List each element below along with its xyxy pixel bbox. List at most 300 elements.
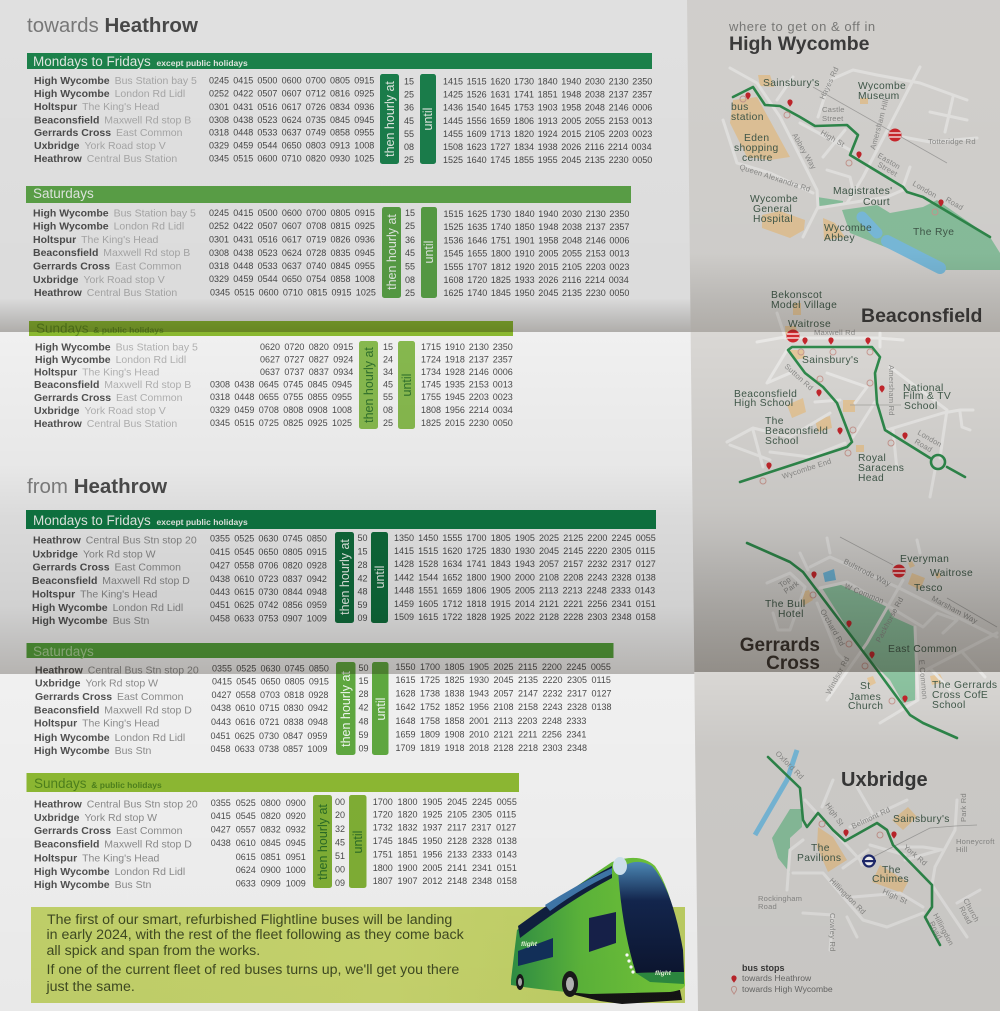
map labels: High School [734,398,793,409]
until: until [422,241,436,263]
minutes past: 25 [404,155,414,165]
late times: 1709 1819 1918 2018 2128 2218 2303 2348 [396,743,587,753]
map labels: School [932,700,966,711]
minutes past: 25 [405,288,415,298]
stop names: Holtspur The King's Head [34,366,160,378]
early times: 0345 0515 0725 0825 0925 1025 [210,418,352,428]
map: Uxbridge [755,749,995,952]
until [421,207,437,298]
early times: 0427 0557 0832 0932 [211,824,306,834]
bus route [740,347,965,482]
late times: 1715 1910 2130 2350 [421,342,513,352]
late times: 1755 1945 2203 0023 [421,392,513,402]
road labels [738,65,976,212]
header bar: Sundays & public holidays [36,321,164,336]
late times: 1425 1526 1631 1741 1851 1948 2038 2137 2357 [443,90,652,100]
late times [443,76,652,165]
road labels: Honeycroft [956,837,995,846]
stop names: Beaconsfield Maxwell Rd stop D [32,575,190,587]
early times: 0427 0558 0706 0820 0928 [210,560,327,570]
minutes past: 28 [358,560,368,570]
road labels: Park [782,579,801,596]
minutes past: 45 [405,248,415,258]
early times: 0438 0610 0715 0830 0942 [211,703,328,713]
header bar: Sundays & public holidays [34,776,162,791]
road labels: High St [819,128,847,149]
map labels: The Gerrards [932,680,997,691]
early times: 0318 0448 0533 0637 0740 0845 0955 [209,261,375,271]
road labels: Top [777,575,793,590]
minutes past: 42 [358,702,369,712]
illustration: green double-decker bus [511,857,685,1004]
minutes past: 09 [335,878,345,888]
road labels: Totteridge Rd [928,137,976,146]
minutes past: 51 [335,851,345,861]
background: right map panel [687,0,1000,1011]
callout: new Flightline buses notice: If one of the current fleet of red buses turns up, we'll get you there [46,962,459,978]
map heading: Cross [766,653,820,674]
early times: 0415 0545 0650 0805 0915 [212,676,329,686]
road labels: Church [961,897,981,924]
roads [767,537,997,723]
late times: 1720 1820 1925 2105 2305 0115 [373,810,516,820]
road labels: Park Rd [959,793,968,822]
minutes past: 20 [335,810,345,820]
early times: 0329 0459 0544 0650 0803 0913 1008 [209,140,374,150]
minutes past [335,797,345,888]
early times [209,76,374,164]
stop names: High Wycombe Bus Stn [34,879,152,891]
line to film school [850,404,901,406]
early times: 0345 0515 0600 0710 0815 0915 1025 [210,288,376,298]
map labels [797,814,950,885]
pond [823,569,836,582]
early times: 0633 0909 1009 [236,878,306,888]
map labels: Hospital [753,214,793,225]
minutes past [358,533,368,623]
stop names: Gerrards Cross East Common [34,392,183,404]
map: Beaconsfield [727,290,982,497]
early times: 0415 0545 0650 0805 0915 [210,547,327,557]
stop names: High Wycombe Bus Station bay 5 [34,75,197,87]
map labels: Magistrates' [833,186,892,197]
late times: 1509 1615 1722 1828 1925 2022 2128 2228 2303 2348 0158 [394,612,656,622]
timetable: towards Heathrow, Sundays [29,321,513,430]
road labels: Amersham Hill [868,98,890,151]
stop names: High Wycombe London Rd Lidl [34,732,185,744]
bus stops [810,571,908,704]
map labels: The [811,843,830,854]
late times: 1445 1556 1659 1806 1913 2005 2055 2153 0013 [443,116,652,126]
stop names: High Wycombe London Rd Lidl [34,88,185,100]
stop names: Gerrards Cross East Common [34,825,183,837]
then hourly at [313,795,332,888]
until: until [421,108,435,130]
minutes past: 25 [404,90,414,100]
early times: 0245 0415 0500 0600 0700 0805 0915 [209,76,374,86]
early times: 0329 0459 0708 0808 0908 1008 [210,405,352,415]
road labels: Hill [956,845,967,854]
late times: 1415 1515 1620 1725 1830 1930 2045 2145 2220 2305 0115 [394,546,655,556]
minutes past: 45 [335,838,345,848]
minutes past: 55 [404,129,414,139]
map labels: The [765,416,784,427]
minutes past: 55 [405,262,415,272]
early times: 0438 0610 0845 0945 [211,838,306,848]
road labels: Sutton Rd [783,362,815,392]
late times: 1442 1544 1652 1800 1900 2000 2108 2208 2243 2328 0138 [394,572,656,582]
early times [209,208,376,298]
stop names: Beaconsfield Maxwell Rd stop B [33,247,190,259]
early times: 0427 0558 0703 0818 0928 [212,690,328,700]
map labels: Head [858,473,884,484]
early times: 0458 0633 0753 0907 1009 [210,614,327,624]
road labels: Orchard Rd [818,608,847,648]
minutes past: 00 [335,797,345,807]
map labels: Saracens [858,463,904,474]
then hourly at [336,662,356,755]
map labels: Tesco [914,583,943,594]
stop names: Heathrow Central Bus Stn stop 20 [33,534,197,546]
map labels: Wycombe [824,223,872,234]
map labels: Sainsbury's [893,814,950,825]
early times: 0355 0525 0800 0900 [211,798,306,808]
early times [210,534,327,624]
map labels: Cross CofE [932,690,988,701]
minutes past: 25 [383,418,393,428]
early times [210,664,329,754]
stop names [34,75,197,165]
map labels: Royal [858,453,886,464]
map labels: Film & TV [903,391,951,402]
road labels: London [916,428,943,449]
minutes past: 15 [405,208,415,218]
road labels: Easton [876,151,902,171]
until [372,662,388,755]
stop names: Holtspur The King's Head [33,234,159,246]
early times: 0245 0415 0500 0600 0700 0805 0915 [209,208,375,218]
roads [787,780,980,950]
road labels [758,749,995,952]
stop names: High Wycombe Bus Stn [32,615,150,627]
icon: railway station [786,330,800,342]
road labels: Amersham Rd [887,365,896,416]
map labels: Waitrose [930,568,973,579]
early times [211,798,306,888]
timetable: towards Heathrow, Mondays to Fridays [27,53,652,165]
stop names: Holtspur The King's Head [34,101,160,113]
early times: 0438 0610 0723 0837 0942 [210,574,327,584]
map labels [734,290,951,484]
minutes past: 24 [383,354,393,364]
header bar [26,510,656,529]
road labels: Bulstrode Way [842,557,892,588]
map labels: Church [848,701,883,712]
minutes past: 50 [358,663,369,673]
map labels: shopping [734,143,779,154]
map labels: General [753,204,792,215]
until [349,795,366,888]
stop names: High Wycombe Bus Stn [34,745,152,757]
late times: 1515 1625 1730 1840 1940 2030 2130 2350 [444,209,629,219]
callout: new Flightline buses notice: in early 2024, with the rest of the fleet following as they come back [46,927,465,943]
illustration: green double-decker bus: flight [521,941,538,948]
timetable: from Heathrow, Sundays [26,773,519,891]
road labels: Hayes Rd [818,65,841,101]
road labels: Hillingdon [931,912,956,947]
road labels: E Common [917,659,929,700]
map labels: Abbey [824,233,855,244]
road labels: Maxwell Rd [814,328,855,337]
minutes past: 15 [383,342,393,352]
stop names: Uxbridge York Rd stop W [35,678,158,690]
road labels: Road [758,902,777,911]
late times: 1436 1540 1645 1753 1903 1958 2048 2146 0006 [443,102,652,112]
stop names: Uxbridge York Rd stop W [32,548,156,560]
stop names: Holtspur The King's Head [32,588,158,600]
minutes past: 36 [405,235,415,245]
early times: 0355 0525 0630 0745 0850 [210,534,327,544]
minutes past [404,76,414,165]
map labels: School [765,436,799,447]
late times [444,209,629,298]
early times: 0620 0720 0820 0915 [260,342,353,352]
then hourly at: then hourly at [338,539,352,615]
road labels: Road [927,920,944,941]
stop names: Gerrards Cross East Common [34,127,183,139]
park: The Rye and lakes [817,197,1000,270]
minutes past: 08 [405,275,415,285]
header bar: Saturdays [33,186,94,201]
road labels: Marsham Way [930,594,979,626]
late times: 1455 1609 1713 1820 1924 2015 2105 2203 0023 [443,129,652,139]
minutes past: 09 [358,613,368,623]
late times: 1459 1605 1712 1818 1915 2014 2121 2221 2256 2341 0151 [394,599,656,609]
road labels: York Rd [902,843,929,868]
stop names: Heathrow Central Bus Station [34,153,177,165]
early times: 0318 0448 0655 0755 0855 0955 [210,392,352,402]
header bar [26,186,631,203]
map labels: Eden [744,133,769,144]
road labels: Road [913,437,934,454]
late times: 1807 1907 2012 2148 2348 0158 [373,876,517,886]
road labels: Oxford Rd [774,749,806,781]
minutes past: 45 [404,116,414,126]
road labels: High St [823,801,846,828]
minutes past: 36 [404,102,414,112]
minutes past [383,342,393,428]
minutes past: 48 [358,716,369,726]
minutes past: 50 [358,533,368,543]
early times: 0451 0625 0730 0847 0959 [210,731,327,741]
road labels: Belmont Rd [850,805,892,831]
buildings [801,561,944,686]
buildings [817,807,917,893]
map labels: station [731,112,764,123]
stop names: Uxbridge York Road stop V [33,274,165,286]
header bar: Mondays to Fridays except public holidays [33,54,248,69]
map heading: Beaconsfield [861,305,982,327]
minutes past: 15 [358,546,368,556]
until [371,532,388,623]
stop names [34,342,198,430]
early times: 0415 0545 0820 0920 [211,811,306,821]
early times: 0624 0900 1000 [236,865,306,875]
map labels: School [904,401,938,412]
until: until [373,566,387,588]
late times: 1550 1700 1805 1905 2025 2115 2200 2245 0055 [396,662,611,672]
early times: 0329 0459 0544 0650 0754 0858 1008 [209,274,375,284]
then hourly at: then hourly at [316,804,330,880]
map heading: where to get on & off in [728,19,876,34]
early times: 0345 0515 0600 0710 0820 0930 1025 [209,154,374,164]
title: towards Heathrow: towards Heathrow [27,14,198,37]
early times: 0301 0431 0516 0617 0726 0834 0936 [209,102,374,112]
map: High Wycombe [723,19,1000,270]
callout: new Flightline buses notice [31,907,685,1003]
late times: 1808 1956 2214 0034 [421,405,513,415]
map labels: The Bull [765,599,806,610]
late times: 1628 1738 1838 1943 2057 2147 2232 2317 0127 [396,688,612,698]
minutes past: 08 [404,142,414,152]
early times: 0458 0633 0738 0857 1009 [210,744,327,754]
early times: 0308 0438 0523 0624 0735 0845 0945 [209,115,374,125]
minutes past: 15 [358,676,369,686]
callout: new Flightline buses notice: just the same. [46,979,135,995]
early times: 0355 0525 0630 0745 0850 [212,664,329,674]
stop names: Beaconsfield Maxwell Rd stop B [34,114,191,126]
then hourly at: then hourly at [383,81,397,157]
stop names: Heathrow Central Bus Stn stop 20 [35,664,199,676]
stop names: Gerrards Cross East Common [32,562,181,574]
road labels: Windsor Rd [824,655,851,696]
early times: 0252 0422 0507 0607 0712 0816 0925 [209,88,374,98]
map labels: The [882,865,901,876]
early times: 0252 0422 0507 0607 0708 0815 0925 [209,221,375,231]
stop names: Heathrow Central Bus Stn stop 20 [34,798,198,810]
minutes past: 42 [358,574,368,584]
road labels: High St [881,887,909,906]
stop names [34,664,199,757]
stop names [32,534,197,627]
late times: 1734 1928 2146 0006 [421,367,513,377]
road labels: London [911,179,938,200]
map labels: Bekonscot [771,290,822,301]
stop names [34,798,198,891]
late times: 1555 1707 1812 1920 2015 2105 2203 0023 [444,262,629,272]
minutes past: 25 [405,221,415,231]
timetable: towards Heathrow, Saturdays [26,186,631,299]
stop names: Uxbridge York Road stop V [34,405,166,417]
map labels: centre [742,153,773,164]
bus stops [819,821,897,839]
map labels: Wycombe [750,194,798,205]
legend: bus stops [731,963,833,994]
early times: 0443 0616 0721 0838 0948 [211,717,328,727]
map labels: Everyman [900,554,949,565]
then hourly at [380,74,399,164]
then hourly at [335,532,354,623]
late times: 1751 1851 1956 2133 2333 0143 [373,850,517,860]
map heading [740,635,820,674]
map labels: Wycombe [858,81,906,92]
late times: 1448 1551 1659 1806 1905 2005 2113 2213 2248 2333 0143 [394,586,655,596]
road labels [781,328,943,481]
minutes past: 48 [358,586,368,596]
minutes past: 59 [358,600,368,610]
stop names: Holtspur The King's Head [34,852,160,864]
early times: 0627 0727 0827 0924 [260,354,353,364]
callout: new Flightline buses notice: The first of our smart, refurbished Flightline buses will be landing [47,912,452,928]
common [822,583,915,703]
minutes past: 15 [404,76,414,86]
road labels: Rockingham [758,894,802,903]
bus route [747,543,957,738]
icon: railway station [892,564,906,578]
legend: bus stops: towards High Wycombe [742,984,833,994]
map: Gerrards Cross [740,537,997,738]
late times: 1700 1800 1905 2045 2245 0055 [373,797,517,807]
buildings [730,75,868,240]
until: until [374,698,388,720]
illustration: green double-decker bus: flight [655,970,672,977]
then hourly at: then hourly at [385,214,399,290]
map labels: National [903,383,944,394]
late times [421,342,513,428]
bus stops [760,337,908,484]
stop names: High Wycombe London Rd Lidl [33,220,184,232]
stop names: Gerrards Cross East Common [35,691,184,703]
map labels: Chimes [872,874,909,885]
stop names: Uxbridge York Road stop V [34,140,166,152]
late times: 1825 2015 2230 0050 [421,418,513,428]
buildings [785,303,864,452]
late times: 1659 1809 1908 2010 2121 2211 2256 2341 [396,730,586,740]
until: until [400,374,414,396]
road labels: Castle [822,105,845,114]
road labels: Abbey Way [790,132,818,171]
map heading: Gerrards [740,635,820,656]
road labels: Queen Alexandra Rd [738,162,812,194]
road labels: Packhorse Rd [874,595,905,644]
stop names: High Wycombe London Rd Lidl [34,866,185,878]
early times: 0308 0438 0645 0745 0845 0945 [210,380,352,390]
bus route [733,87,990,237]
late times: 1428 1528 1634 1741 1843 1943 2057 2157 2232 2317 0127 [394,559,656,569]
late times: 1724 1918 2137 2357 [421,354,513,364]
early times: 0301 0431 0516 0617 0719 0826 0936 [209,234,375,244]
map heading: High Wycombe [729,33,870,55]
late times: 1545 1655 1800 1910 2005 2055 2153 0013 [444,248,629,258]
early times: 0318 0448 0533 0637 0749 0858 0955 [209,128,374,138]
map labels: Waitrose [788,319,831,330]
late times: 1745 1935 2153 0013 [421,380,513,390]
map labels [731,78,954,244]
map labels: Hotel [778,609,804,620]
title: from Heathrow: from Heathrow [27,475,167,498]
late times [396,662,612,753]
late times: 1642 1752 1852 1956 2108 2158 2243 2328 0138 [396,702,612,712]
map labels: Beaconsfield [765,426,828,437]
header bar [29,321,513,336]
stop names: Heathrow Central Bus Station [34,287,177,299]
early times: 0637 0737 0837 0934 [260,367,353,377]
timetable: from Heathrow, Saturdays [26,643,614,757]
then hourly at [359,341,378,429]
stop names: Beaconsfield Maxwell Rd stop D [34,838,192,850]
late times [394,533,656,622]
road labels: Street [822,114,844,123]
